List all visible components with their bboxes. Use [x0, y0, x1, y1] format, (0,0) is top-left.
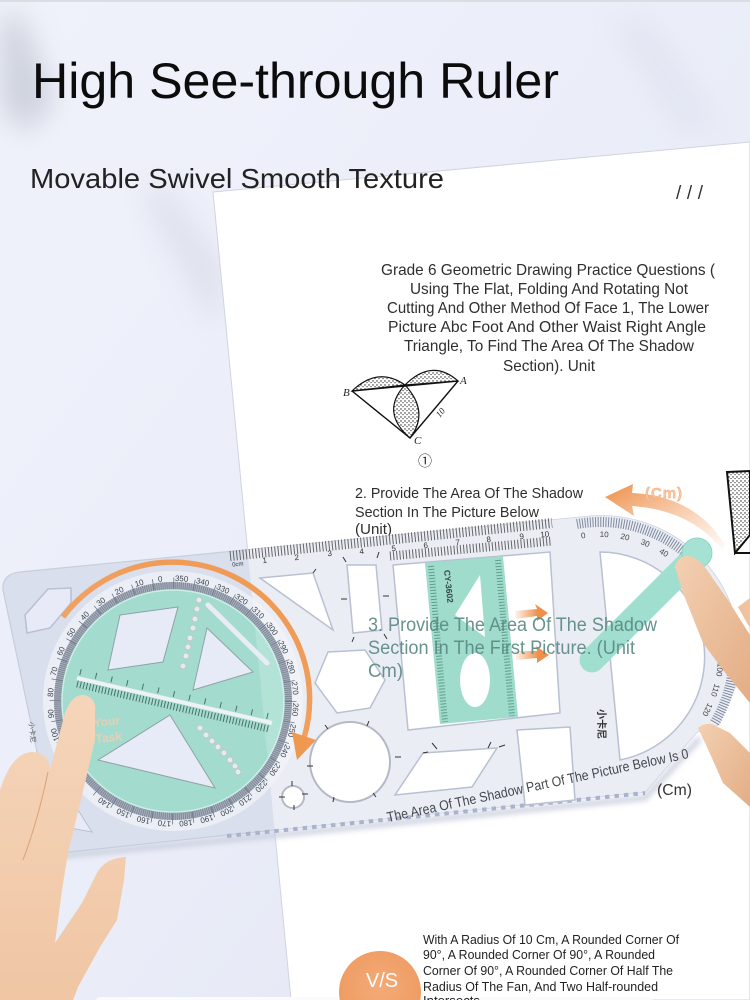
disc degree labels: 270 [290, 681, 300, 696]
movable teal ruler [425, 556, 518, 724]
question 1 text: Section). Unit [503, 358, 596, 375]
disc degree labels: 40 [79, 609, 92, 622]
disc degree labels: 10 [134, 578, 145, 589]
movable teal ruler: CY-3602 [442, 569, 455, 604]
disc degree labels: 140 [96, 795, 113, 810]
hole: semicircle [600, 552, 705, 760]
bottom white panel [96, 997, 653, 1000]
ruler scale: 1 [262, 556, 268, 565]
disc degree labels: 90 [46, 708, 56, 719]
question 2 text: Section In The Picture Below [355, 504, 539, 521]
geometry figure 1 [343, 370, 467, 469]
disc degree labels: 20 [113, 585, 126, 597]
disc hole: large triangle [98, 715, 215, 788]
question 1 text [381, 262, 716, 375]
protractor scale: 20 [620, 532, 631, 543]
disc degree labels: 150 [115, 806, 131, 820]
disc degree labels: 0 [158, 574, 163, 584]
protractor scale: 120 [700, 702, 714, 718]
disc pin holes [180, 597, 241, 775]
disc degree labels: 300 [265, 621, 280, 637]
badge: V/S [339, 951, 421, 1000]
hole: lower left [70, 810, 92, 832]
ruler body [3, 516, 740, 852]
comparison text: Radius Of The Fan, And Two Half-rounded [423, 979, 658, 994]
geometry figure 1: 10 [434, 406, 447, 419]
disc degree labels: 220 [253, 778, 269, 794]
teal swivel arm [592, 538, 712, 660]
disc degree labels: 250 [286, 723, 298, 739]
disc degree labels: 100 [49, 727, 61, 742]
geometry figure 1: B [343, 387, 350, 399]
disc degree labels: 320 [233, 592, 250, 607]
ruler scale: 2 [294, 553, 300, 562]
hole: window [393, 552, 560, 730]
disc degree labels: 330 [215, 582, 231, 596]
answer line text: The Area Of The Shadow Part Of The Picture Below Is 0 [385, 745, 690, 825]
disc degree labels: 310 [250, 605, 266, 621]
ruler scale: 5 [391, 544, 397, 553]
hole: left hexagon [25, 588, 71, 633]
protractor scale: 0 [580, 531, 587, 540]
disc degree labels: 210 [237, 793, 253, 808]
disc degree labels: 70 [49, 665, 60, 677]
disc degree labels: 30 [95, 595, 108, 608]
ruler scale: 3 [327, 549, 333, 558]
disc degree labels: 260 [290, 703, 300, 717]
badge: V/S: V/S [366, 970, 398, 992]
question 3 overlay text: 3. Provide The Area Of The Shadow [368, 615, 657, 636]
text on disc [93, 713, 123, 746]
right hand [675, 556, 750, 807]
hole: lower rectangle [517, 727, 575, 805]
protractor scale: 100 [714, 663, 725, 677]
arrows: small orange [515, 604, 549, 663]
ruler scale: 0cm [232, 561, 244, 569]
hole: parallelogram [395, 748, 497, 795]
question 1 text: Grade 6 Geometric Drawing Practice Questions ( [381, 262, 716, 279]
unit text: (Cm) [657, 782, 692, 799]
disc degree labels: 340 [195, 576, 211, 588]
hole: rectangle [347, 565, 382, 633]
disc degree labels: 80 [46, 687, 56, 697]
comparison text: Corner Of 90°, A Rounded Corner Of Half The [423, 963, 673, 978]
disc degree labels: 60 [55, 645, 67, 657]
disc paper overlay [255, 627, 284, 758]
label: orange cm: (Cm) [645, 485, 682, 502]
title: High See-through Ruler [32, 53, 559, 109]
ruler scale [230, 523, 552, 569]
disc hole: triangle [193, 628, 253, 690]
question 3 overlay text: Cm) [368, 661, 403, 682]
hole: triangle [260, 573, 333, 630]
disc tick ring [58, 586, 288, 816]
question 1 text: Cutting And Other Method Of Face 1, The Lower [387, 300, 710, 317]
question 1 text: Triangle, To Find The Area Of The Shadow [404, 338, 694, 355]
hole: small circle [282, 786, 304, 808]
text on disc: Your [93, 713, 121, 730]
icon: slashes: /// [676, 183, 704, 204]
arrow: rotate around disc [63, 562, 316, 760]
disc degree labels: 280 [285, 660, 297, 675]
ruler scale: 8 [486, 535, 492, 544]
comparison text [423, 932, 679, 1000]
disc degree labels: 230 [267, 761, 282, 778]
ruler drop shadow [60, 738, 700, 856]
small vertical mark: 小卡尼 [27, 721, 38, 743]
protractor scale: 10 [600, 530, 609, 539]
protractor scale [577, 522, 733, 724]
question 3 overlay text [368, 615, 657, 682]
disc degree labels: 50 [65, 626, 78, 639]
ruler scale: 10 [540, 530, 550, 539]
brand label: 小卡尼 [595, 709, 608, 739]
disc hole: quadrilateral [108, 607, 178, 670]
question 2 text [355, 485, 583, 538]
hole: large circle [310, 722, 390, 802]
disc degree labels: 290 [276, 639, 290, 656]
disc degree labels: 190 [199, 813, 214, 825]
disc degree labels: 170 [157, 818, 171, 828]
rotating disc [43, 571, 303, 831]
ruler scale: 9 [519, 532, 525, 541]
disc body [62, 590, 284, 812]
geometry figure 1: ① [418, 453, 432, 469]
question 2 text: 2. Provide The Area Of The Shadow [355, 485, 583, 502]
disc ruler slot [77, 678, 272, 723]
arrow: rotate up [605, 484, 725, 549]
partial figure top right [727, 471, 750, 553]
ruler scale: 7 [455, 538, 461, 547]
disc degree labels: 350 [175, 574, 189, 584]
left hand [0, 695, 126, 1000]
hole marks [279, 552, 505, 810]
ruler scale: 4 [359, 547, 365, 556]
hole: hexagon [315, 650, 385, 713]
question 2 text: (Unit) [355, 521, 392, 538]
ruler scale: 6 [423, 541, 429, 550]
comparison text: 90°, A Rounded Corner Of 90°, A Rounded [423, 947, 655, 962]
disc slot [208, 605, 267, 663]
comparison text: With A Radius Of 10 Cm, A Rounded Corner Of [423, 932, 679, 947]
geometry figure 1: C [414, 435, 422, 447]
question 3 overlay text: Section In The First Picture. (Unit [368, 638, 636, 659]
disc degree labels [46, 574, 300, 828]
disc degree labels: 160 [135, 814, 151, 826]
question 1 text: Using The Flat, Folding And Rotating Not [410, 281, 689, 298]
protractor scale: 110 [709, 683, 721, 698]
geometry figure 1: A [459, 375, 467, 387]
text on disc: Task [95, 729, 123, 746]
paper sheet [213, 142, 750, 1000]
subtitle: Movable Swivel Smooth Texture [30, 163, 444, 194]
disc degree labels: 180 [178, 818, 193, 828]
question 1 text: Picture Abc Foot And Other Waist Right Angle [388, 319, 706, 336]
disc degree labels: 200 [218, 804, 235, 818]
protractor scale: 30 [639, 537, 651, 549]
protractor scale: 40 [658, 547, 670, 559]
disc degree labels: 240 [278, 743, 292, 759]
